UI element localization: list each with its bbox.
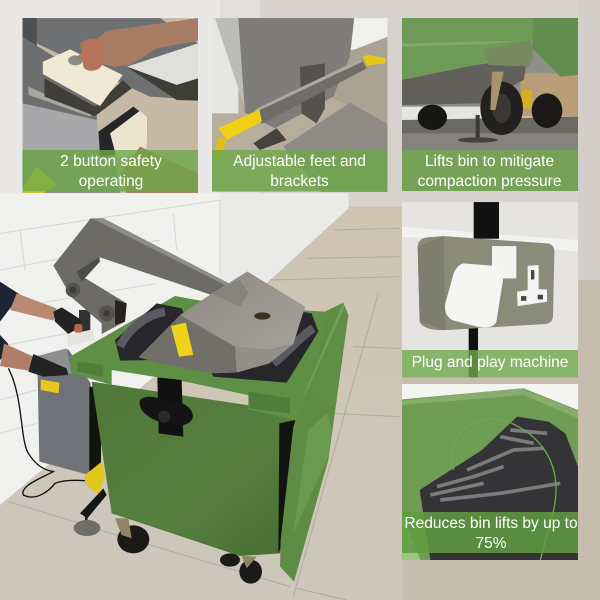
upright post xyxy=(79,310,90,335)
panel: 2 button safety operating xyxy=(22,18,198,193)
main photo: compactor on a green bin xyxy=(0,193,403,600)
caption text: compaction pressure xyxy=(418,173,561,190)
caption text: brackets xyxy=(270,173,329,190)
adjustable foot xyxy=(74,488,107,536)
caption text: 75% xyxy=(475,535,507,552)
green bin body xyxy=(70,302,348,582)
caption band xyxy=(402,150,578,191)
white block wall xyxy=(0,193,348,505)
yellow floor bracket xyxy=(85,462,105,495)
black refuse bags xyxy=(115,300,318,383)
panel: reduces bin lifts by up to 75% xyxy=(402,384,578,560)
white plug xyxy=(445,263,503,328)
yellow warning label xyxy=(171,323,193,357)
caption text: Plug and play machine xyxy=(412,354,568,371)
photo: hand on safety buttons xyxy=(22,18,198,193)
photo: wall socket with white plug xyxy=(402,202,578,378)
photo: bin raised on casters xyxy=(402,18,578,191)
socket face xyxy=(517,265,547,306)
photo: compacted bag in the bin xyxy=(402,384,578,560)
bin front rim xyxy=(70,357,308,421)
panel: lifts bin to mitigate compaction pressure xyxy=(402,18,578,191)
caption band xyxy=(402,350,578,378)
caption text: 2 button safety xyxy=(60,153,162,170)
photo: machine feet with yellow brackets xyxy=(212,18,388,192)
caption band xyxy=(212,150,388,191)
panel: plug and play machine xyxy=(402,202,578,378)
rocker switch xyxy=(492,246,516,278)
power cable xyxy=(8,368,85,497)
floor tile joints xyxy=(8,228,400,600)
hinged side lid xyxy=(280,313,348,582)
panel: adjustable feet and brackets xyxy=(212,18,388,192)
caption text: Lifts bin to mitigate xyxy=(425,153,554,170)
caption text: Reduces bin lifts by up to xyxy=(404,515,578,532)
caption text: Adjustable feet and xyxy=(233,153,366,170)
bin wheels xyxy=(115,518,262,584)
compactor head xyxy=(138,272,305,373)
operator arms and gloves xyxy=(0,282,95,377)
caption band xyxy=(402,512,578,553)
bin back rim and interior xyxy=(70,296,343,407)
dark gap beside the lid xyxy=(278,420,295,553)
black bin latch xyxy=(140,377,193,437)
caption band xyxy=(22,150,198,192)
caption text: operating xyxy=(79,173,143,190)
floor xyxy=(0,207,403,600)
grey control box xyxy=(37,348,101,483)
lever arm xyxy=(53,218,248,334)
